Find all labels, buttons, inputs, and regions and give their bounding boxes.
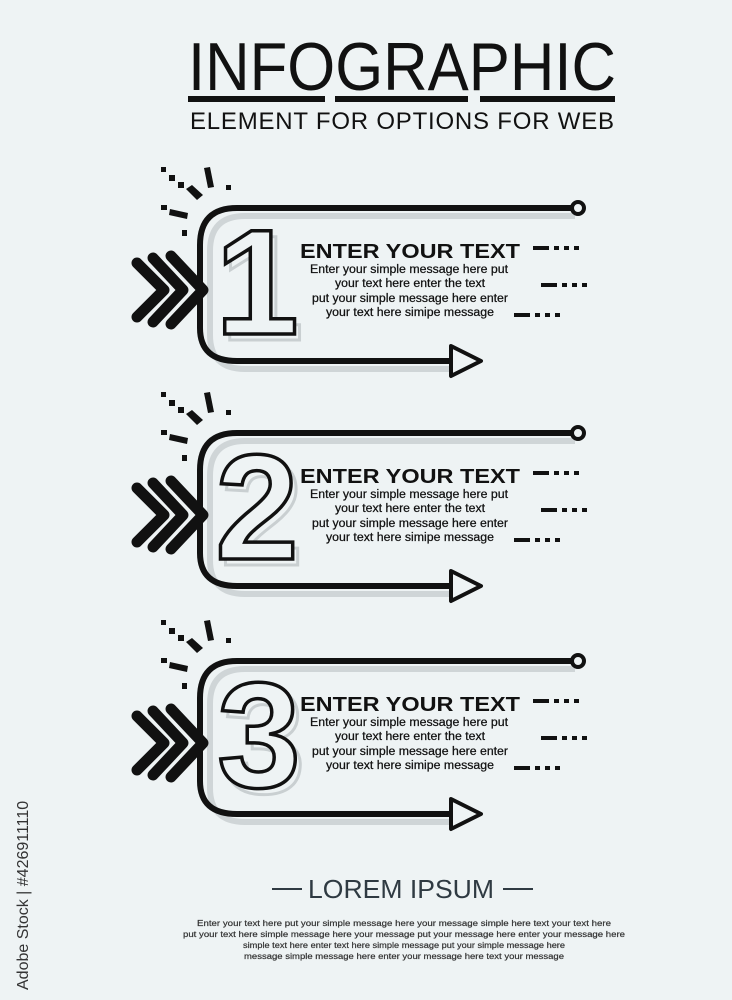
watermark side text: Adobe Stock | #426911110 <box>15 801 32 990</box>
number 3: 3 <box>217 651 301 819</box>
title: ELEMENT FOR OPTIONS FOR WEB <box>190 108 614 135</box>
number 1: 1 <box>215 198 299 366</box>
number 3: 3 <box>222 657 306 825</box>
number 2: 2 <box>215 423 299 591</box>
footer text: message simple message here enter your message here text your message <box>244 952 565 961</box>
footer text: Enter your text here put your simple message here your message simple here text your text here <box>197 919 612 928</box>
number 2: 2 <box>220 429 304 597</box>
panel: step 1 <box>137 167 587 376</box>
title <box>188 29 616 135</box>
footer heading: LOREM IPSUM <box>308 874 494 904</box>
footer text: simple text here enter text here simple message put your simple message here <box>243 941 566 950</box>
title: INFOGRAPHIC <box>188 29 616 105</box>
panel: step 2 <box>137 392 587 601</box>
number 1: 1 <box>220 204 304 372</box>
footer text <box>183 919 626 961</box>
footer text: put your text here simple message here your message put your message here enter your message here <box>183 930 626 939</box>
panel: step 3 <box>137 620 587 829</box>
